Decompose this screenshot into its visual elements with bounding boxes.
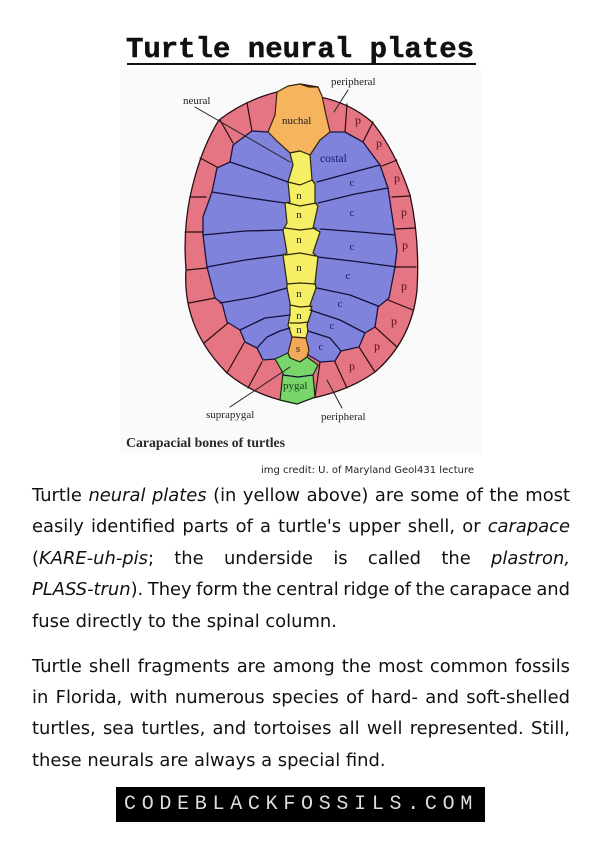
paragraph one bbox=[32, 485, 570, 632]
diagram labels: peripheral bbox=[321, 411, 366, 423]
peripheral letters: p bbox=[349, 359, 355, 373]
suprapygal neural bbox=[288, 337, 309, 362]
peripheral letters: p bbox=[355, 113, 361, 127]
neural letters: n bbox=[296, 262, 302, 274]
costal letters: c bbox=[319, 341, 324, 353]
neural letters: n bbox=[296, 288, 302, 300]
costal letters: c bbox=[338, 298, 343, 310]
costal bones bbox=[203, 131, 397, 362]
peripheral letters: p bbox=[391, 314, 397, 328]
peripheral letters: p bbox=[394, 171, 400, 185]
peripheral letters: p bbox=[374, 339, 380, 353]
neural letters: s bbox=[296, 343, 300, 355]
paragraph one: fuse directly to the spinal column. bbox=[32, 611, 337, 632]
website banner bbox=[116, 787, 485, 822]
carapace diagram bbox=[126, 76, 418, 450]
neural bones bbox=[283, 151, 320, 338]
pygal and suprapygal bbox=[275, 353, 318, 404]
leader lines bbox=[195, 90, 348, 408]
paragraph one: PLASS-trun). They form the central ridge of the carapace and bbox=[32, 579, 570, 600]
peripheral letters: p bbox=[401, 279, 407, 293]
costal letters bbox=[319, 177, 355, 353]
paragraph two: in Florida, with numerous species of hard- and soft-shelled bbox=[32, 687, 570, 708]
neural letters: n bbox=[296, 234, 302, 246]
title: Turtle neural plates bbox=[126, 33, 474, 66]
diagram labels: costal bbox=[320, 153, 347, 165]
diagram labels: neural bbox=[183, 95, 210, 107]
costal letters: c bbox=[350, 241, 355, 253]
bone sutures bbox=[203, 162, 397, 377]
neural letters: n bbox=[296, 310, 302, 322]
paragraph two bbox=[32, 656, 570, 771]
nuchal bone bbox=[268, 84, 330, 155]
costal letters: c bbox=[346, 270, 351, 282]
diagram labels: nuchal bbox=[282, 115, 311, 127]
peripheral letters bbox=[349, 113, 408, 373]
paragraph one: Turtle neural plates (in yellow above) are some of the most bbox=[32, 485, 570, 506]
costal letters: c bbox=[330, 320, 335, 332]
peripheral letters: p bbox=[402, 238, 408, 252]
neural letters: n bbox=[296, 190, 302, 202]
neural letters: n bbox=[296, 324, 302, 336]
diagram labels: suprapygal bbox=[206, 409, 254, 421]
peripheral bones bbox=[185, 84, 418, 404]
costal letters: c bbox=[350, 207, 355, 219]
neural dividers bbox=[285, 180, 316, 323]
neural letters bbox=[296, 190, 302, 355]
costal letters: c bbox=[350, 177, 355, 189]
paragraph two: Turtle shell fragments are among the most common fossils bbox=[32, 656, 570, 677]
diagram labels: peripheral bbox=[331, 76, 376, 88]
paragraph one: (KARE-uh-pis; the underside is called the plastron, bbox=[32, 548, 570, 569]
peripheral letters: p bbox=[401, 205, 407, 219]
diagram labels: pygal bbox=[283, 380, 307, 392]
diagram labels bbox=[183, 76, 376, 423]
diagram caption: Carapacial bones of turtles bbox=[126, 435, 286, 450]
neural letters: n bbox=[296, 209, 302, 221]
paragraph two: turtles, sea turtles, and tortoises all well represented. Still, bbox=[32, 718, 570, 739]
paragraph two: these neurals are always a special find. bbox=[32, 750, 386, 771]
paragraph one: easily identified parts of a turtle's upper shell, or carapace bbox=[32, 516, 570, 537]
website banner: CODEBLACKFOSSILS.COM bbox=[124, 793, 478, 816]
peripheral letters: p bbox=[376, 136, 382, 150]
image credit: img credit: U. of Maryland Geol431 lecture bbox=[261, 465, 474, 476]
